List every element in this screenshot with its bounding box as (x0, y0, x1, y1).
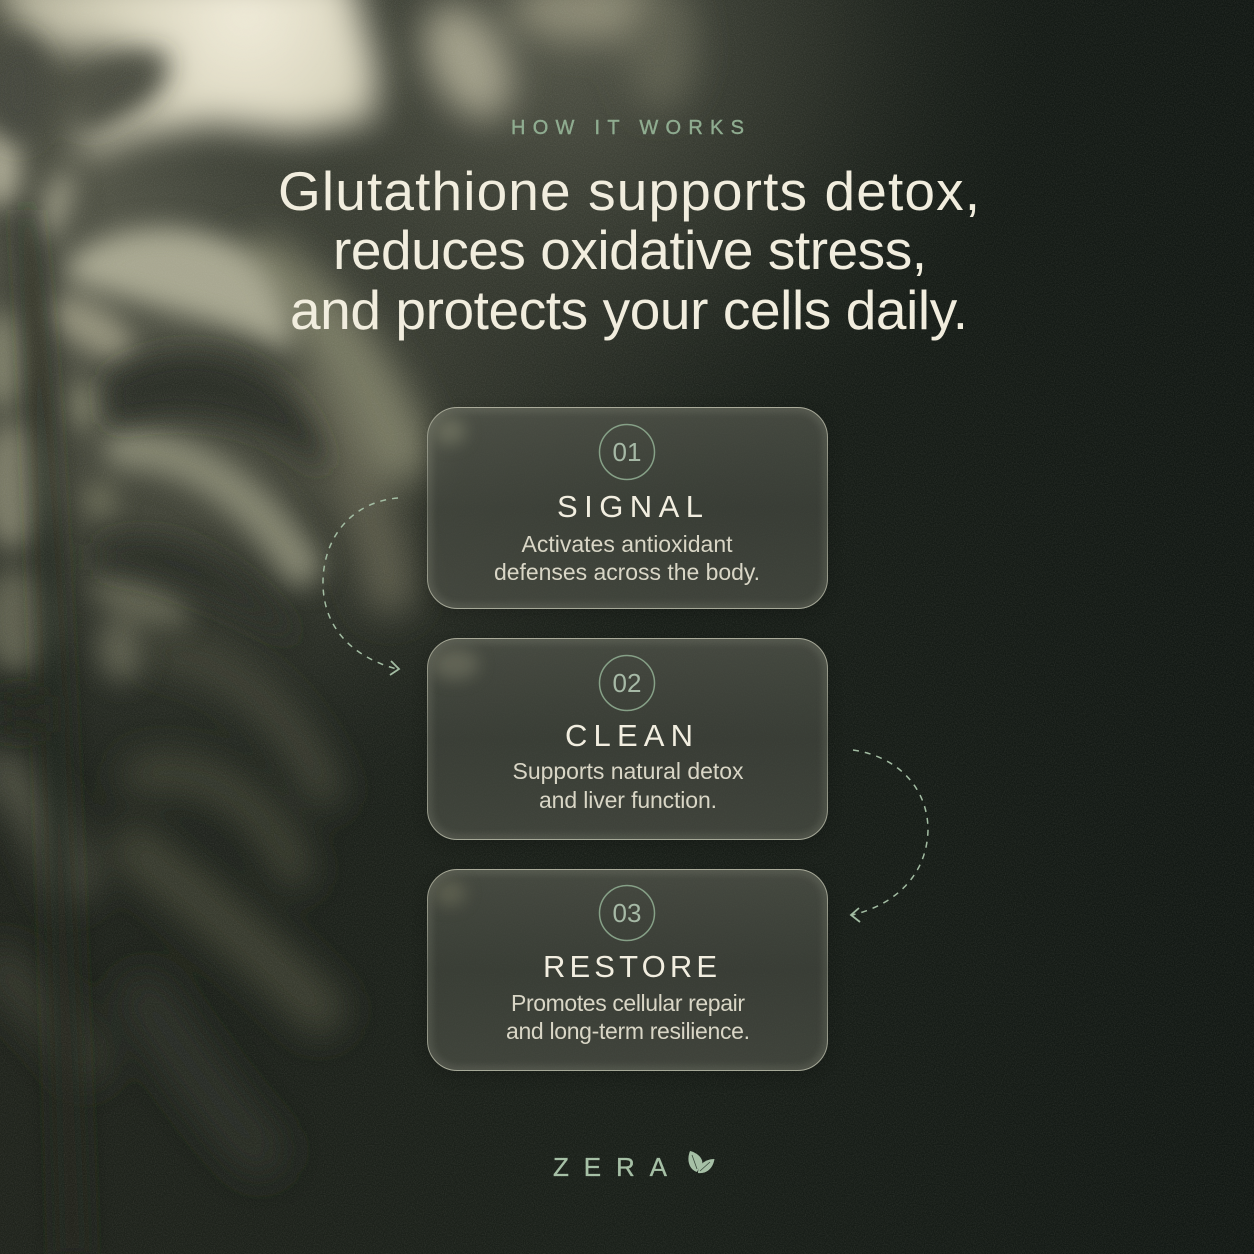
card 2: clean (427, 638, 828, 844)
arrow: signal to clean (323, 498, 399, 675)
headline: reduces oxidative stress, (333, 219, 927, 281)
brand wordmark: zera: ZERA (553, 1152, 668, 1182)
step title: RESTORE (543, 949, 717, 984)
step number 01: 01 (613, 437, 641, 467)
step number 03: 03 (613, 898, 641, 928)
step description: Promotes cellular repair (511, 990, 745, 1016)
arrow: clean to restore (851, 750, 928, 922)
bright lit wall (0, 0, 378, 158)
lit bands (0, 270, 400, 1150)
step description (494, 531, 760, 585)
headline (278, 160, 980, 341)
step number 02: 02 (613, 668, 641, 698)
eyebrow: how it works: HOW IT WORKS (511, 117, 744, 139)
step description: Activates antioxidant (522, 531, 733, 557)
step description: defenses across the body. (494, 559, 760, 585)
step title: CLEAN (565, 718, 693, 753)
lit patches between leaves (0, 121, 300, 685)
headline: and protects your cells daily. (290, 279, 968, 341)
dark shadow shapes (0, 38, 324, 1254)
step description (506, 990, 750, 1044)
step description (512, 758, 744, 813)
upper right lit streaks (405, 0, 696, 135)
step description: Supports natural detox (512, 758, 744, 784)
step number 03 (600, 886, 654, 940)
card 3: restore (427, 870, 828, 1075)
headline: Glutathione supports detox, (278, 160, 980, 222)
step number 02 (600, 656, 654, 710)
step description: and liver function. (539, 787, 717, 813)
card 1: signal (427, 408, 828, 613)
step title: SIGNAL (557, 489, 703, 524)
step number 01 (600, 424, 654, 480)
step description: and long-term resilience. (506, 1018, 750, 1044)
icon: brand leaves (688, 1151, 714, 1173)
